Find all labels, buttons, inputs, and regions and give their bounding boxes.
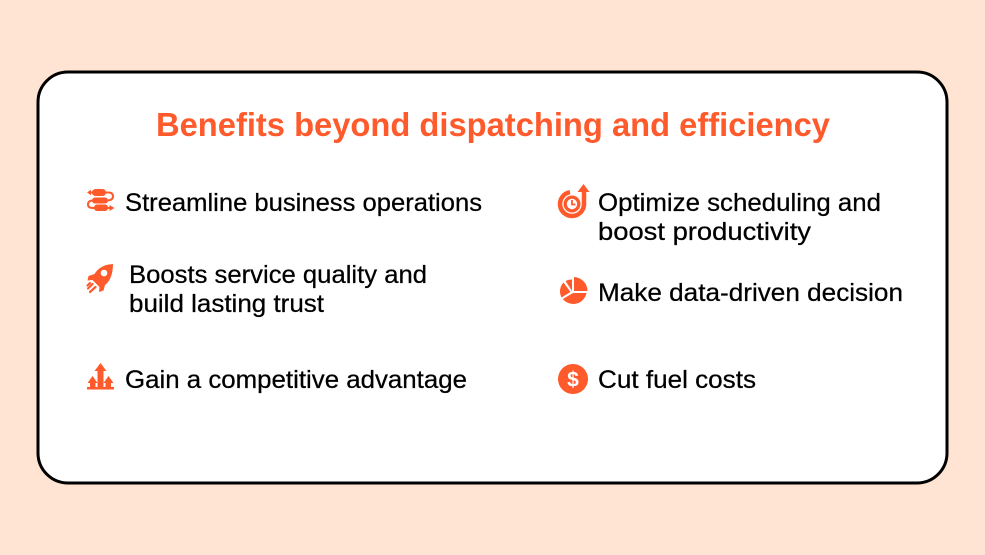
text: service quality — [129, 261, 427, 318]
text: service quality: Boosts service quality and — [129, 261, 427, 289]
icon: rising arrows — [87, 363, 114, 390]
icon: rocket — [88, 264, 113, 292]
text: streamline: Streamline business operations — [125, 189, 482, 217]
icon: dollar coin — [558, 364, 588, 394]
text: fuel costs: Cut fuel costs — [598, 366, 756, 394]
text: service quality: build lasting trust — [129, 290, 324, 318]
text: scheduling — [598, 189, 881, 246]
text: data-driven: Make data-driven decision — [598, 279, 903, 307]
text: scheduling: Optimize scheduling and — [598, 189, 881, 217]
icon: dollar coin: $ — [567, 368, 579, 392]
icon: pie chart — [560, 277, 588, 304]
icon: clock with arrow — [560, 184, 590, 216]
text: scheduling: boost productivity — [598, 218, 812, 246]
text: competitive advantage: Gain a competitive advantage — [125, 366, 467, 394]
title: Benefits beyond dispatching and efficiency — [156, 106, 831, 143]
panel: benefits card — [38, 72, 947, 483]
icon: streamline pipes — [87, 189, 114, 211]
